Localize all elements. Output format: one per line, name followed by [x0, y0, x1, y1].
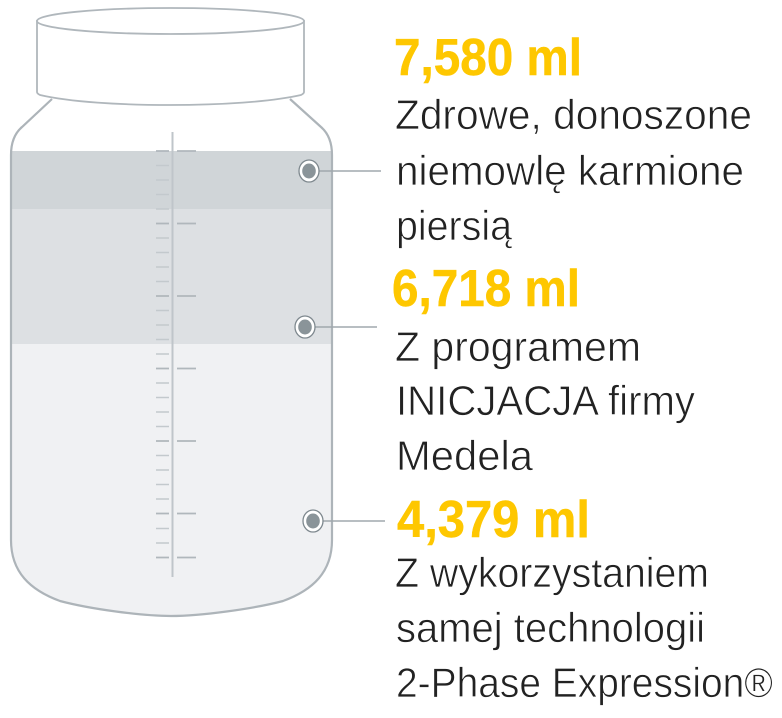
text block: 6,718 ml: Medela — [396, 432, 534, 479]
measuring scale — [156, 132, 196, 577]
text block: 7,580 ml: niemowlę karmione — [396, 147, 744, 194]
text block: 6,718 ml: INICJACJA firmy — [396, 377, 695, 424]
text block: 6,718 ml: Z programem — [395, 323, 641, 370]
bottle — [0, 8, 345, 624]
bottle outline — [11, 99, 332, 616]
milk level bands — [0, 151, 345, 624]
marker: 6,718 ml — [295, 316, 377, 338]
text block: 7,580 ml: 7,580 ml — [394, 29, 582, 87]
marker: 7,580 ml — [299, 160, 381, 182]
text block: 7,580 ml: Zdrowe, donoszone — [395, 91, 752, 138]
text block: 6,718 ml — [392, 260, 695, 479]
text block: 4,379 ml: 4,379 ml — [397, 491, 590, 549]
text block: 4,379 ml — [395, 491, 773, 706]
marker: 4,379 ml — [303, 510, 385, 532]
text block: 7,580 ml: piersią — [396, 202, 513, 249]
text block: 4,379 ml: Z wykorzystaniem — [395, 549, 709, 596]
text block: 4,379 ml: samej technologii — [396, 604, 705, 651]
text block: 6,718 ml: 6,718 ml — [392, 260, 580, 318]
bottle lid — [37, 8, 304, 105]
text block: 7,580 ml — [394, 29, 752, 249]
